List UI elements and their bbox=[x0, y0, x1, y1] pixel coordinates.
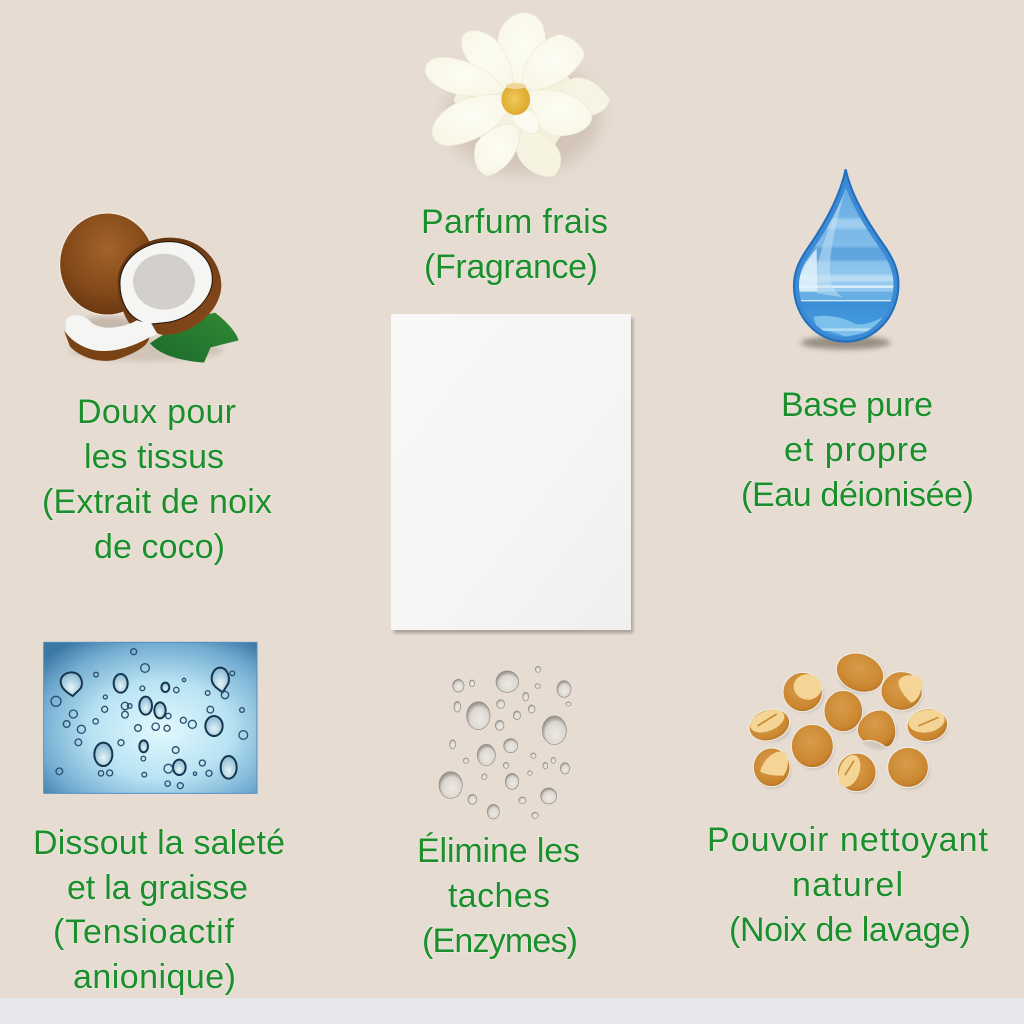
label: surfactant: anionique) bbox=[73, 958, 236, 996]
wedge shell bbox=[64, 331, 149, 361]
icon: coconut bbox=[60, 213, 239, 363]
label: soap nuts: Pouvoir nettoyant bbox=[707, 821, 989, 859]
label: enzymes: taches bbox=[448, 877, 550, 915]
label: water: et propre bbox=[784, 431, 928, 469]
half coconut shell bbox=[118, 238, 221, 335]
label: surfactant bbox=[33, 824, 285, 996]
label: fragrance: Parfum frais bbox=[421, 203, 608, 241]
label: soap nuts: naturel bbox=[792, 866, 903, 904]
icon: clear water droplets bbox=[439, 666, 571, 819]
central blank white panel bbox=[391, 314, 633, 633]
label: fragrance bbox=[421, 203, 608, 286]
wedge flesh bbox=[66, 315, 157, 351]
half coconut hollow bbox=[133, 254, 195, 310]
label: surfactant: Dissout la saleté bbox=[33, 824, 285, 862]
label: water: (Eau déionisée) bbox=[741, 476, 974, 514]
label: surfactant: et la graisse bbox=[67, 869, 248, 907]
label: coconut: de coco) bbox=[94, 528, 225, 566]
label: enzymes: Élimine les bbox=[417, 832, 580, 870]
label: coconut: (Extrait de noix bbox=[42, 483, 272, 521]
label: surfactant: (Tensioactif bbox=[53, 913, 235, 951]
label: coconut: Doux pour bbox=[77, 393, 236, 431]
icon: flower bbox=[425, 13, 610, 177]
label: enzymes: (Enzymes) bbox=[422, 922, 578, 960]
label: water bbox=[741, 386, 974, 514]
label: water: Base pure bbox=[781, 386, 933, 424]
label: coconut: les tissus bbox=[84, 438, 224, 476]
label: fragrance: (Fragrance) bbox=[424, 248, 598, 286]
whole coconut bbox=[60, 213, 155, 315]
leaf bbox=[150, 313, 239, 363]
label: enzymes bbox=[417, 832, 580, 960]
label: soap nuts: (Noix de lavage) bbox=[729, 911, 971, 949]
label: coconut bbox=[42, 393, 272, 566]
icon: soap nuts bbox=[745, 646, 950, 794]
label: soap nuts bbox=[707, 821, 989, 949]
icon: water drop bbox=[793, 169, 900, 349]
bottom strip bbox=[0, 998, 1024, 1024]
half coconut flesh bbox=[120, 242, 212, 326]
icon: blue bubbles bbox=[44, 642, 257, 793]
